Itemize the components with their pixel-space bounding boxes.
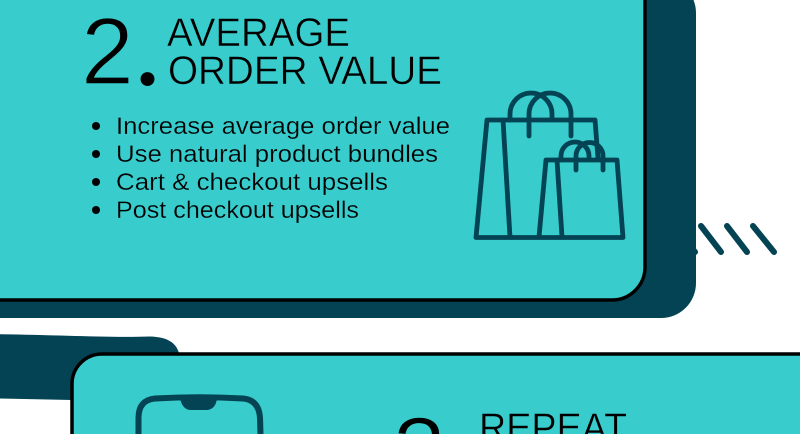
bullet list: Use natural product bundles [116,141,438,168]
icon: smartphone [138,397,260,434]
panel: repeat [72,354,800,434]
bullet list: Post checkout upsells [116,197,359,224]
bullet list: Increase average order value [116,113,450,140]
card background [72,354,800,434]
bullet list [92,113,450,224]
heading: average order value: ORDER VALUE [168,49,442,93]
panel shadow: dark backing of card 2 [0,0,696,318]
number 2: 2 [81,0,134,105]
panel: average order value [0,0,645,300]
heading: average order value [167,11,442,93]
heading: average order value: AVERAGE [167,11,350,55]
accent: dark brush stroke [0,334,179,400]
bullet list: Cart & checkout upsells [116,169,388,196]
card background [0,0,645,300]
icon: shopping bags [476,93,623,238]
number 2 [81,0,162,110]
accent: diagonal slashes [674,226,774,252]
